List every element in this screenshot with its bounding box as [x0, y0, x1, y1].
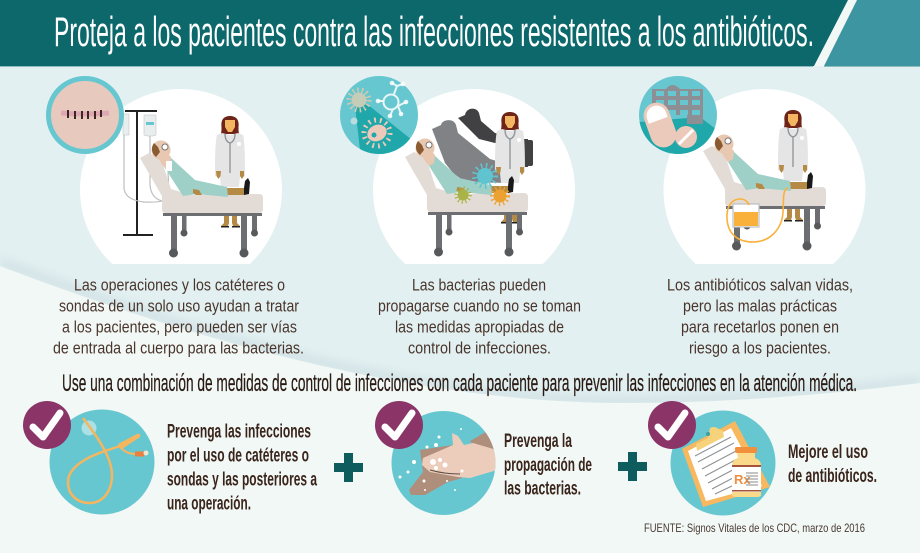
icon: incision inset — [48, 78, 122, 152]
description text: control de infecciones. — [408, 338, 551, 358]
icon: germ inset — [340, 76, 418, 154]
panel: operations and catheters — [48, 78, 304, 358]
description text: las medidas apropiadas de — [395, 318, 564, 336]
description text: pero las malas prácticas — [683, 296, 837, 316]
icon: clipboard and bottle — [670, 410, 776, 516]
step: hand washing — [375, 401, 592, 515]
shadow beds — [432, 109, 533, 183]
panel: spreading bacteria — [340, 76, 581, 358]
doctor — [778, 110, 808, 222]
description text — [53, 276, 304, 358]
bed — [140, 153, 263, 258]
white circle — [373, 89, 575, 264]
icon: hospital and pills inset — [639, 76, 717, 154]
white circle — [664, 89, 866, 264]
icon: check badge — [648, 401, 696, 449]
description text: Los antibióticos salvan vidas, — [667, 276, 853, 294]
description text — [667, 276, 853, 358]
icon: check badge — [375, 401, 423, 449]
step text — [167, 422, 317, 514]
step text: una operación. — [167, 494, 251, 514]
step text: Prevenga la — [504, 431, 572, 452]
icon: clipboard and bottle: Rx — [734, 472, 751, 487]
icon: neck catheter — [166, 161, 172, 171]
step text: Mejore el uso — [788, 442, 868, 463]
icon: urine bag and tube — [727, 188, 788, 242]
description text: Las bacterias pueden — [412, 276, 546, 294]
header band — [0, 0, 920, 67]
icon: check badge — [23, 401, 71, 449]
plus sign — [334, 453, 363, 482]
doctor — [215, 116, 245, 228]
step text: sondas y las posteriores a — [167, 470, 317, 490]
icon: orange germ — [492, 188, 508, 204]
icon: hands — [392, 411, 500, 515]
description text: de entrada al cuerpo para las bacterias. — [53, 338, 304, 358]
description text — [378, 276, 581, 358]
icon: blue germ — [474, 166, 496, 186]
bed — [703, 146, 826, 250]
step: catheters — [23, 401, 317, 514]
source note: FUENTE: Signos Vitales de los CDC, marzo de 2016 — [644, 521, 865, 535]
white circle — [80, 89, 282, 264]
description text: propagarse cuando no se toman — [378, 296, 581, 316]
patient — [416, 138, 514, 195]
description text: para recetarlos ponen en — [681, 318, 839, 336]
icon: IV pole — [123, 111, 168, 235]
patient — [714, 134, 813, 191]
icon: catheter — [50, 410, 154, 514]
description text: riesgo a los pacientes. — [689, 338, 831, 358]
icon: green germ — [456, 188, 470, 202]
step: antibiotic use — [648, 401, 877, 516]
background — [0, 66, 920, 403]
step text: las bacterias. — [504, 478, 581, 500]
panel: antibiotics — [639, 76, 866, 358]
step text — [788, 442, 877, 487]
description text: Las operaciones y los catéteres o — [74, 276, 285, 294]
description text: sondas de un solo uso ayudan a tratar — [59, 296, 299, 316]
description text: a los pacientes, pero pueden ser vías — [62, 318, 297, 336]
step text: propagación de — [504, 455, 592, 476]
step text — [504, 431, 592, 500]
step text: por el uso de catéteres o — [167, 446, 309, 466]
patient — [152, 140, 250, 197]
step text: Prevenga las infecciones — [167, 422, 311, 442]
doctor — [495, 112, 525, 224]
bed — [405, 152, 528, 256]
plus sign — [618, 452, 647, 481]
